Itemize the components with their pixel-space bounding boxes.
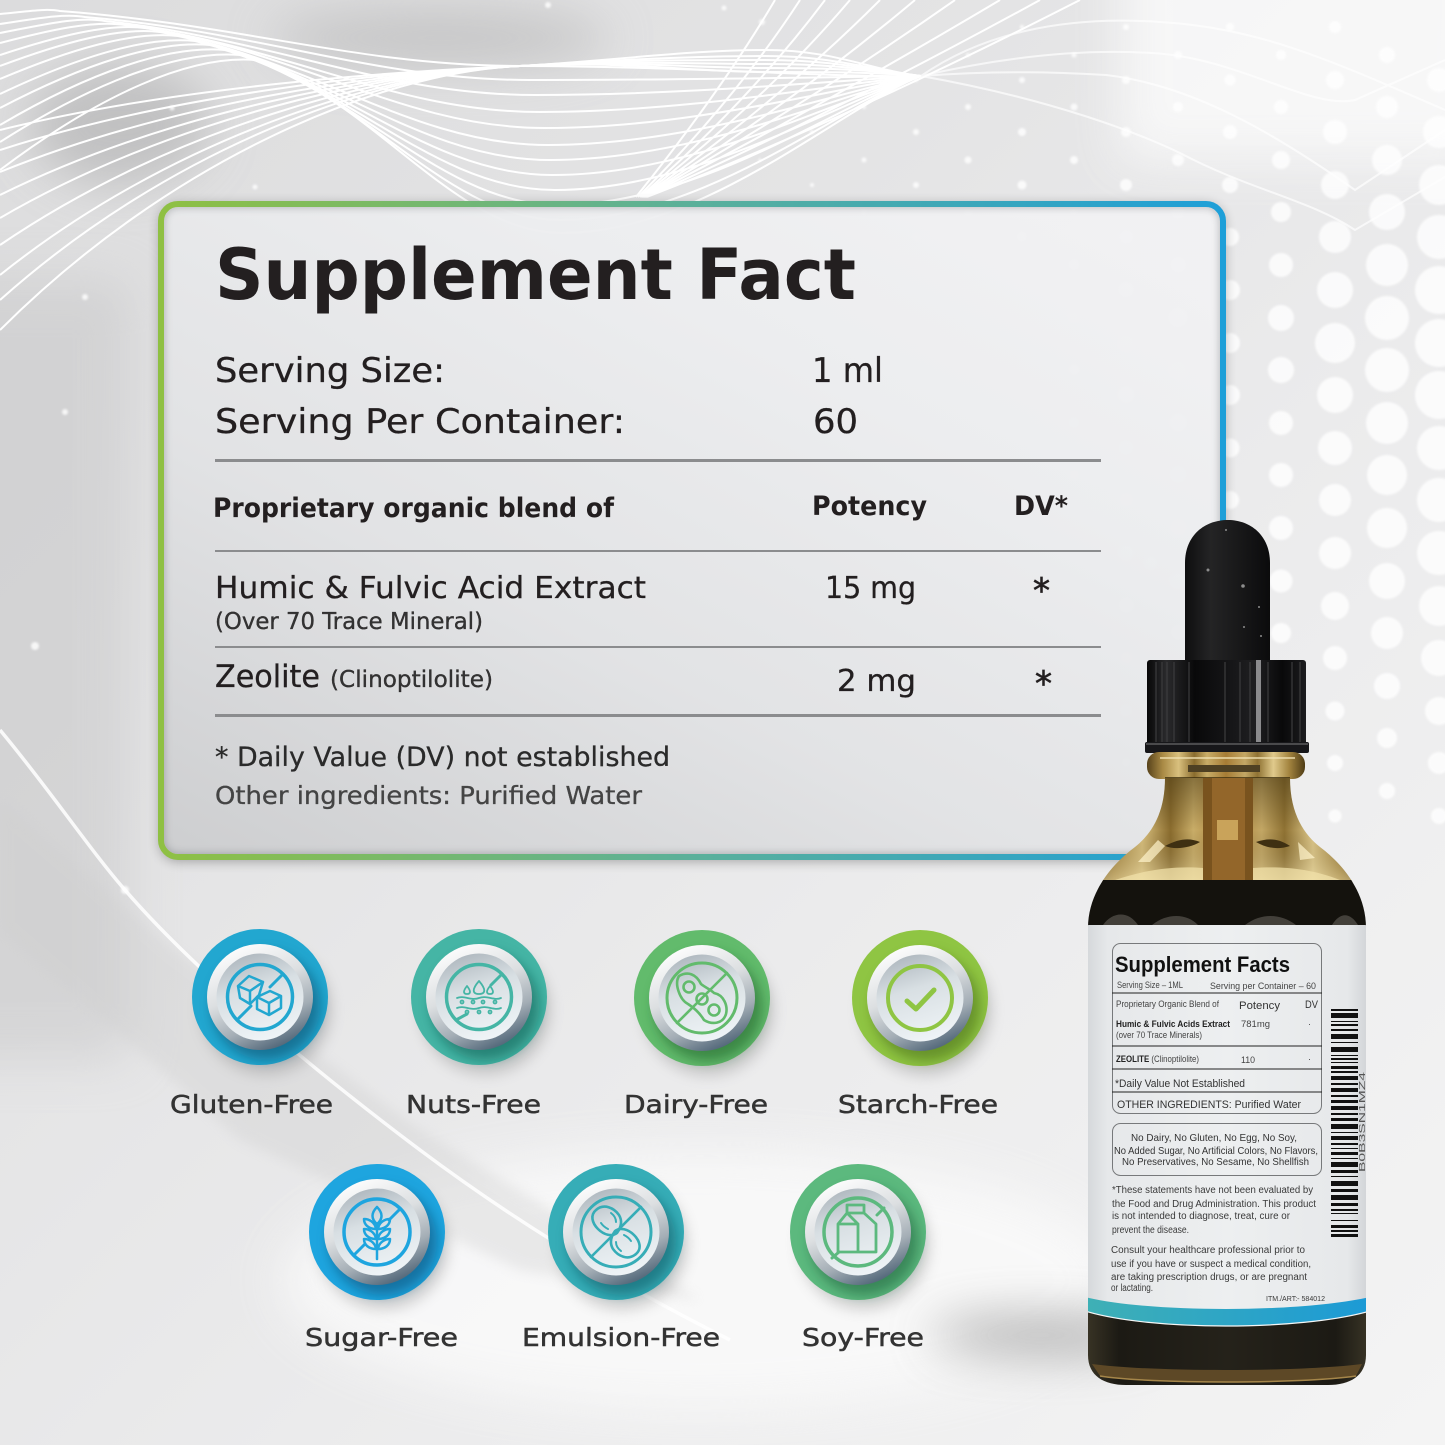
serving info [215, 351, 883, 442]
bottle label disclaimers: is not intended to diagnose, treat, cure or [1112, 1211, 1291, 1222]
bottle label allergen box [1112, 1124, 1322, 1176]
product bottle [1085, 520, 1370, 1390]
dark liquid [1085, 880, 1370, 926]
glass neck ring [1147, 752, 1305, 779]
title: Supplement Fact [215, 234, 856, 316]
serving info: 60 [813, 402, 858, 442]
icon: emulsion-free [548, 1164, 689, 1311]
row: humic and fulvic acid: 15 mg [825, 571, 916, 606]
icon: sugar-free [309, 1164, 450, 1311]
icon: starch-free [852, 930, 993, 1077]
bottle label nutrition box: · [1308, 1019, 1311, 1029]
label: emulsion-free: Emulsion-Free [522, 1323, 720, 1352]
icon: soy-free [790, 1164, 931, 1311]
bottle barcode: B0B3SN1MZ4 [1358, 1071, 1367, 1172]
serving info: 1 ml [812, 351, 883, 391]
row: zeolite: 2 mg [837, 664, 916, 699]
bottle label disclaimers: prevent the disease. [1112, 1225, 1189, 1236]
row: humic and fulvic acid: (Over 70 Trace Mineral) [215, 609, 483, 635]
bottle label nutrition box: Serving Size – 1ML [1117, 980, 1183, 990]
panel shadow [160, 205, 1224, 861]
wave line mesh [0, 0, 1445, 330]
table header [213, 491, 1068, 524]
table header: DV* [1014, 491, 1068, 522]
bottle label nutrition box: Proprietary Organic Blend of [1116, 999, 1219, 1009]
label: sugar-free: Sugar-Free [305, 1323, 458, 1352]
label: dairy-free: Dairy-Free [624, 1090, 768, 1119]
bottle label disclaimers: the Food and Drug Administration. This product [1112, 1199, 1316, 1210]
footnotes: * Daily Value (DV) not established [215, 742, 670, 773]
bottle label nutrition box: Humic & Fulvic Acids Extract [1116, 1019, 1230, 1029]
panel fill [161, 204, 1223, 857]
row: humic and fulvic acid [215, 571, 1050, 635]
bottle label allergen box: No Preservatives, No Sesame, No Shellfish [1122, 1156, 1309, 1168]
row: zeolite [215, 659, 1052, 704]
bottle label nutrition box: 110 [1241, 1055, 1255, 1065]
bottle label disclaimers: are taking prescription drugs, or are pregnant [1111, 1272, 1307, 1283]
bottle label nutrition box: 781mg [1241, 1019, 1270, 1029]
icon: dairy-free [634, 930, 775, 1077]
footnotes: Other ingredients: Purified Water [215, 781, 643, 810]
bottle label allergen box: No Dairy, No Gluten, No Egg, No Soy, [1131, 1132, 1297, 1144]
icon: nuts-free [411, 929, 552, 1076]
bottle label nutrition box: OTHER INGREDIENTS: Purified Water [1117, 1099, 1301, 1111]
bottle label nutrition box [1112, 944, 1322, 1114]
bottle label nutrition box: DV [1305, 999, 1319, 1011]
bottle label nutrition box: Serving per Container – 60 [1210, 981, 1316, 991]
row: zeolite: * [1035, 664, 1052, 704]
bottle label disclaimers: *These statements have not been evaluated by [1112, 1185, 1313, 1196]
bottle floor shadow [930, 1317, 1150, 1353]
bottle barcode [1331, 1009, 1367, 1237]
table header: Proprietary organic blend of [213, 493, 614, 524]
row: zeolite: Zeolite [215, 659, 320, 695]
bottle label nutrition box: (over 70 Trace Minerals) [1116, 1030, 1202, 1040]
panel: supplement facts [160, 204, 1224, 861]
bottle label nutrition box: Potency [1239, 1000, 1281, 1012]
label: gluten-free: Gluten-Free [170, 1090, 333, 1119]
bottle label disclaimers: ITM./ART:- 584012 [1266, 1296, 1325, 1303]
table header: Potency [812, 491, 927, 522]
background dot lattice [31, 2, 1445, 894]
row: humic and fulvic acid: * [1033, 571, 1050, 611]
bottle label allergen box: No Added Sugar, No Artificial Colors, No Flavors, [1114, 1145, 1318, 1157]
bottle label nutrition box: ZEOLITE (Clinoptilolite) [1116, 1054, 1199, 1064]
label: nuts-free: Nuts-Free [406, 1090, 541, 1119]
bottle label disclaimers: or lactating. [1111, 1283, 1153, 1294]
bottle body [1085, 778, 1370, 1390]
label: soy-free: Soy-Free [802, 1323, 924, 1352]
bottle label nutrition box: Supplement Facts [1115, 952, 1290, 977]
serving info: Serving Per Container: [215, 402, 625, 442]
dropper bulb [1185, 520, 1270, 662]
bottle label nutrition box: *Daily Value Not Established [1115, 1078, 1245, 1090]
bottle label disclaimers: Consult your healthcare professional prior to [1111, 1245, 1305, 1256]
serving info: Serving Size: [215, 351, 445, 391]
bottle label disclaimers [1111, 1185, 1325, 1303]
icon: gluten-free [192, 929, 333, 1076]
row: humic and fulvic acid: Humic & Fulvic Acid Extract [215, 571, 646, 606]
footnotes [215, 742, 670, 810]
row: zeolite: (Clinoptilolite) [330, 667, 493, 693]
bottle label nutrition box: · [1308, 1054, 1311, 1064]
bottle cap [1145, 660, 1309, 753]
label: starch-free: Starch-Free [838, 1090, 998, 1119]
panel frame [161, 204, 1223, 857]
bottle label disclaimers: use if you have or suspect a medical condition, [1111, 1259, 1311, 1270]
